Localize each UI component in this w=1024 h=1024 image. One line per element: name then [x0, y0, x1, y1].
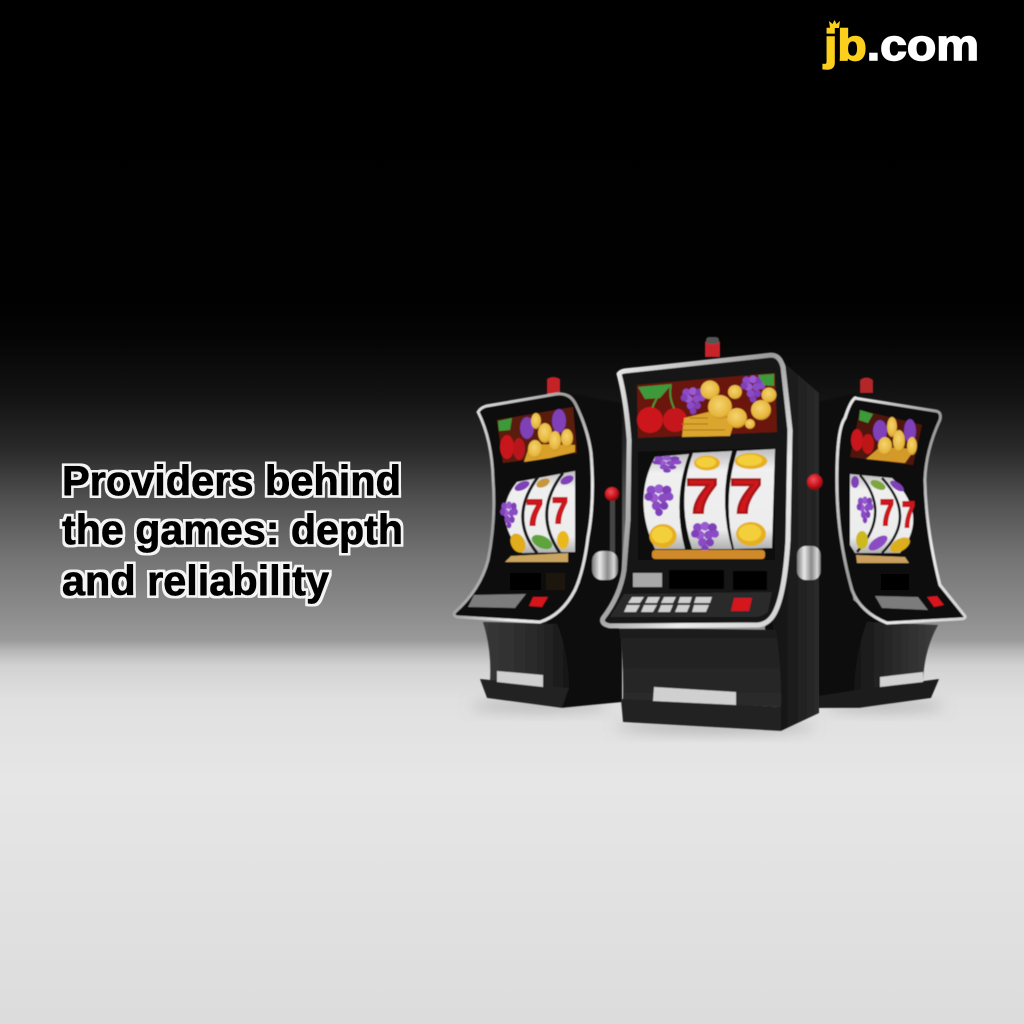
display and slot — [881, 574, 909, 590]
reels: 7 — [526, 492, 543, 533]
reel window — [500, 472, 575, 563]
cabinet side — [818, 393, 887, 708]
artwork fruit and coins — [498, 409, 575, 462]
tray — [621, 699, 781, 731]
tray — [819, 679, 939, 708]
keypad — [875, 596, 928, 610]
deck — [610, 592, 772, 617]
slot machine: centre — [602, 337, 823, 732]
lever — [797, 474, 823, 580]
reels — [644, 449, 775, 552]
cabinet side — [540, 393, 622, 708]
top light — [860, 378, 873, 393]
vent — [633, 573, 662, 587]
reels: 7 — [880, 492, 894, 533]
paytable strip — [505, 553, 568, 562]
slot machine: left — [454, 377, 622, 711]
reel 2 — [684, 451, 732, 549]
logo text: jb.com — [823, 21, 979, 70]
chrome bezel — [602, 355, 790, 626]
title: Providers behind — [62, 457, 401, 504]
artwork screen — [850, 410, 922, 465]
artwork fruit and coins — [637, 374, 776, 437]
reels — [850, 474, 915, 556]
red button — [731, 598, 752, 611]
artwork screen — [637, 373, 777, 438]
keypad — [624, 597, 712, 612]
reels: 7 — [902, 494, 915, 535]
floor shadow — [470, 701, 610, 711]
top light cap — [706, 337, 719, 344]
lever — [592, 487, 619, 580]
chrome bezel — [454, 394, 592, 622]
paytable strip — [856, 555, 909, 563]
floor shadow — [825, 701, 945, 711]
tray — [480, 679, 569, 708]
display — [669, 570, 724, 589]
reel window — [850, 472, 918, 563]
top light — [547, 377, 560, 394]
slot machine: right — [818, 378, 965, 711]
paytable strip — [652, 550, 765, 559]
artwork fruit and coins — [851, 410, 917, 463]
reel 1 — [644, 454, 689, 549]
reels: 7 — [686, 471, 718, 524]
reels: 7 — [730, 471, 762, 524]
keypad — [468, 594, 526, 608]
payout plate — [653, 687, 736, 705]
symbols — [652, 456, 682, 473]
lower cabinet — [483, 622, 569, 690]
logo: jb.com — [823, 20, 979, 70]
payout plate — [497, 671, 543, 687]
red button — [927, 596, 944, 607]
payout plate — [880, 672, 923, 687]
ticket slot — [733, 571, 767, 590]
red button — [529, 597, 548, 607]
icon: crown — [829, 20, 840, 28]
display and slot — [510, 573, 541, 590]
artwork screen — [497, 407, 577, 463]
title — [62, 457, 403, 604]
reels — [500, 471, 575, 555]
reel 3 — [729, 449, 775, 549]
cabinet side — [765, 353, 819, 731]
title: and reliability — [62, 557, 330, 604]
chrome bezel — [837, 398, 965, 623]
lower cabinet — [854, 622, 938, 692]
lower cabinet — [619, 628, 781, 707]
floor shadow — [615, 722, 815, 732]
title: the games: depth — [62, 506, 403, 553]
reel window — [638, 448, 775, 560]
top light — [705, 338, 720, 357]
reels: 7 — [552, 490, 568, 531]
